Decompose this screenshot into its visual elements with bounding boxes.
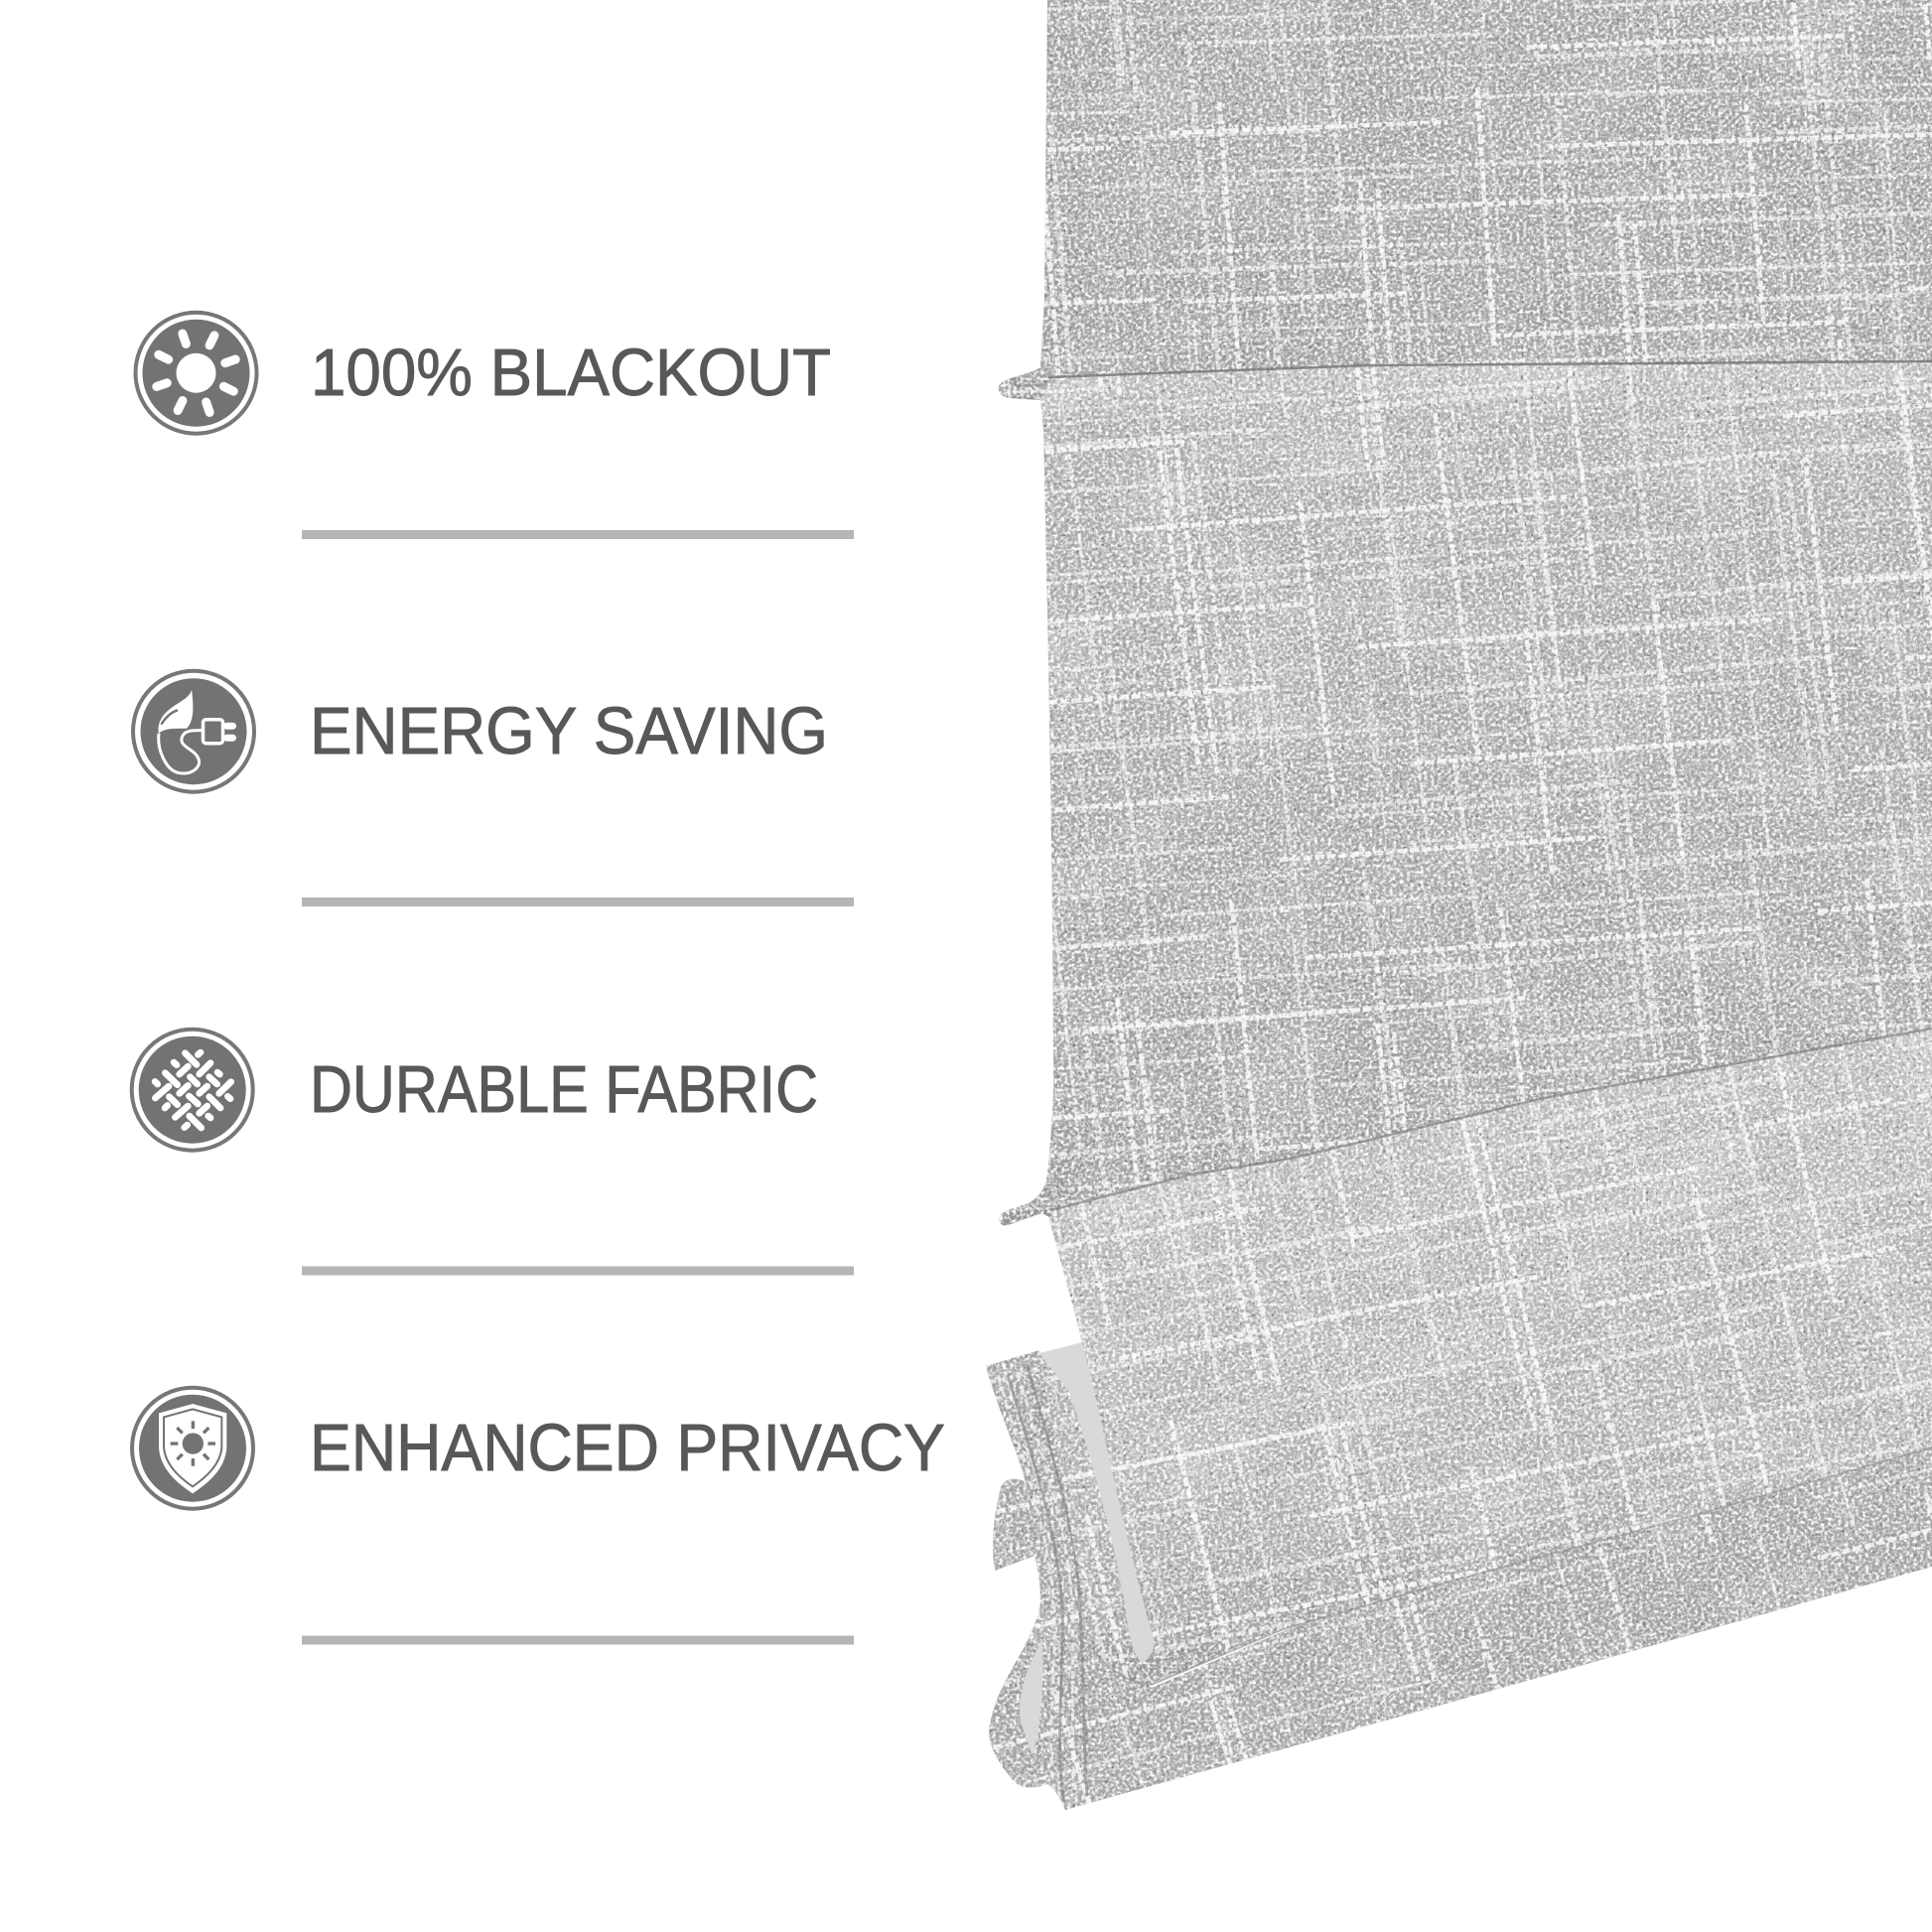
divider bar — [302, 530, 854, 539]
label: durable fabric: DURABLE FABRIC — [310, 1052, 818, 1127]
divider bar — [302, 897, 854, 906]
product illustration: grey textured roman shade — [973, 0, 1932, 1827]
shade: lining at lower pleat — [1020, 1638, 1043, 1755]
icon: woven fabric in circle — [132, 1030, 253, 1151]
shade: shadow under flap — [1092, 1448, 1932, 1685]
label: energy saving: ENERGY SAVING — [310, 694, 828, 768]
feature row: durable fabric — [132, 1030, 854, 1275]
feature row: energy saving — [133, 671, 854, 906]
shade: top panel — [993, 0, 1932, 407]
icon: shield with sun in circle — [132, 1388, 253, 1509]
icon: sun in circle — [135, 313, 256, 434]
divider bar — [302, 1267, 854, 1275]
shade: bottom fold and side pleats — [973, 1330, 1932, 1827]
shade: front rolled flap — [1033, 1023, 1932, 1688]
shade: seam above flap — [1050, 1029, 1932, 1210]
icon: leaf and plug in circle — [133, 671, 254, 792]
shade: middle panel — [993, 357, 1932, 1241]
label: enhanced privacy: ENHANCED PRIVACY — [310, 1411, 945, 1485]
divider bar — [302, 1636, 854, 1644]
shade: seam between top and middle panels — [1048, 361, 1932, 377]
feature row: 100% blackout — [135, 313, 854, 539]
shade: white lining behind flap — [1039, 1342, 1155, 1664]
feature row: enhanced privacy — [132, 1388, 945, 1644]
label: 100% blackout: 100% BLACKOUT — [311, 336, 831, 410]
